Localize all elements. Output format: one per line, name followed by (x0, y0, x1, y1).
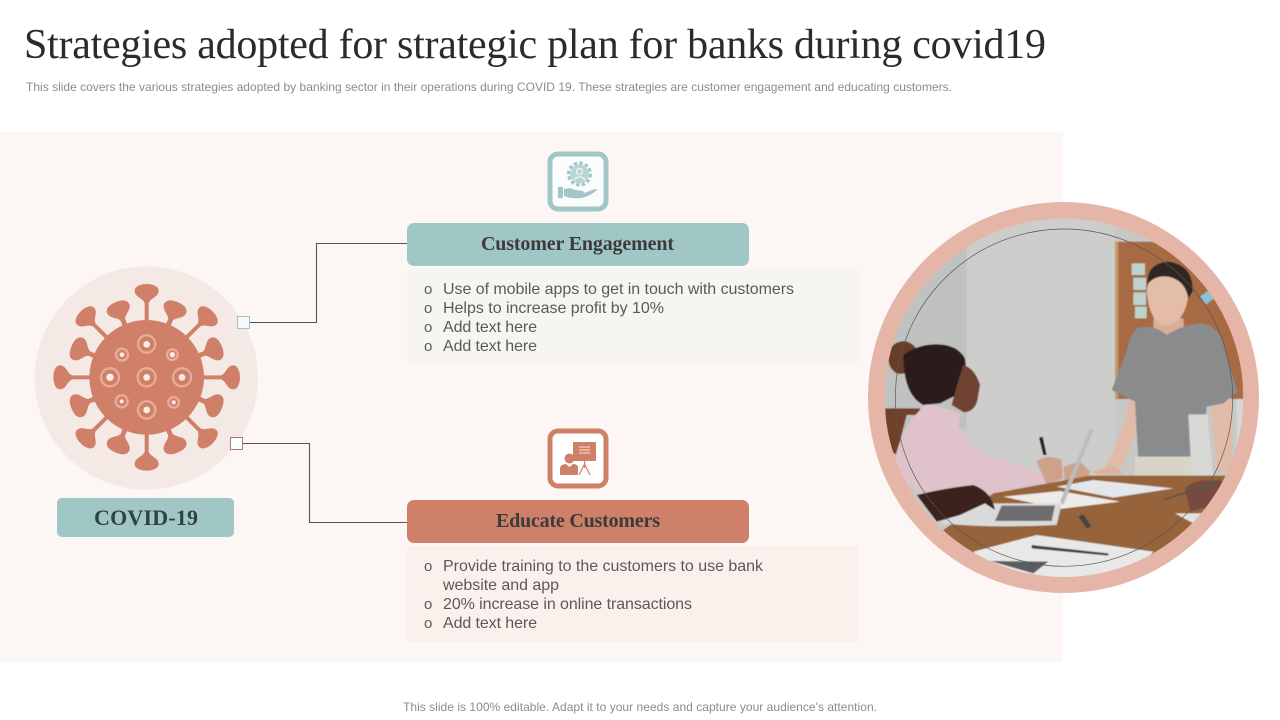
connector: virus to educate customers (243, 444, 407, 522)
text block: educate customers: Add text here (443, 615, 537, 632)
connector node: bottom (230, 438, 242, 450)
header: educate customers: Educate Customers (496, 510, 660, 532)
icon: presenter at board (550, 431, 606, 486)
panel: background (0, 132, 1063, 662)
footer: This slide is 100% editable. Adapt it to your needs and capture your audience's attention. (403, 700, 877, 714)
text block: educate customers: Provide training to the customers to use bank (443, 558, 764, 575)
photo overlay ring (895, 229, 1233, 566)
header: educate customers (407, 500, 749, 543)
title: Strategies adopted for strategic plan for banks during covid19 (24, 22, 1046, 68)
text block: customer engagement: Helps to increase profit by 10% (443, 300, 664, 317)
text block: customer engagement: o (424, 338, 432, 355)
label: COVID-19 (57, 498, 234, 537)
icon: hand holding gear (550, 154, 606, 209)
connector node: top (238, 316, 250, 328)
photo: team meeting in circular frame (868, 202, 1259, 593)
label: COVID-19: COVID-19 (94, 505, 198, 530)
text block: educate customers: o (424, 596, 432, 613)
subtitle: This slide covers the various strategies adopted by banking sector in their operations during COVID 19. These strategies are customer engagement and educating customers. (26, 80, 952, 94)
text block: educate customers: o (424, 615, 432, 632)
text block: educate customers: o (424, 558, 432, 575)
text block: customer engagement: Add text here (443, 338, 537, 355)
header: customer engagement (407, 223, 749, 266)
icon: virus (35, 266, 258, 490)
text block: customer engagement: o (424, 281, 432, 298)
text block: educate customers: website and app (442, 577, 559, 594)
text block: customer engagement (407, 268, 858, 365)
header: customer engagement: Customer Engagement (481, 233, 674, 255)
text block: educate customers: 20% increase in online transactions (443, 596, 692, 613)
text block: customer engagement: Use of mobile apps to get in touch with customers (443, 281, 794, 298)
text block: customer engagement: Add text here (443, 319, 537, 336)
text block: customer engagement: o (424, 319, 432, 336)
connector: virus to customer engagement (250, 244, 407, 322)
text block: educate customers (407, 546, 858, 642)
text block: customer engagement: o (424, 300, 432, 317)
